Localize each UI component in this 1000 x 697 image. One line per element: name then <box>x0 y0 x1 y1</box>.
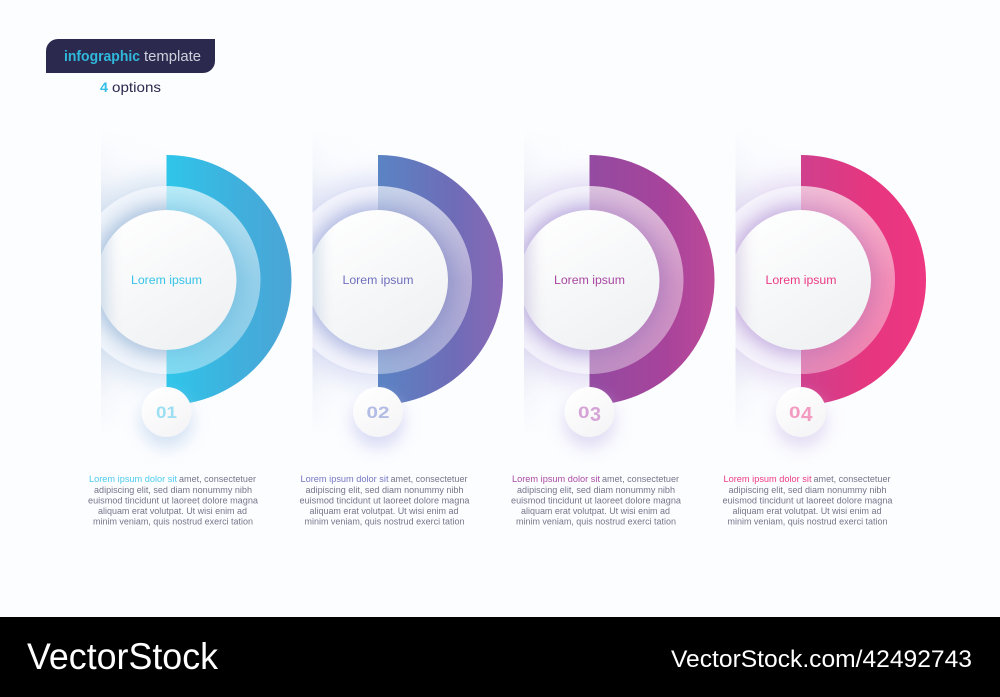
outer half ring <box>590 155 714 405</box>
text block: option 03: aliquam erat volutpat. Ut wisi enim ad <box>521 506 670 516</box>
panel: option 03 <box>524 155 714 452</box>
middle translucent half ring <box>378 186 472 374</box>
text block: option 03: Lorem ipsum dolor sit <box>512 474 601 484</box>
text block: option 04: minim veniam, quis nostrud exerci tation <box>728 516 888 526</box>
text block: option 02: Lorem ipsum dolor sit <box>300 474 389 484</box>
text block: option 03: adipiscing elit, sed diam nonummy nibh <box>517 485 675 495</box>
text block: option 03: minim veniam, quis nostrud exerci tation <box>516 516 676 526</box>
outer half ring <box>801 155 926 405</box>
middle translucent half ring <box>590 186 684 374</box>
number badge 03: 3 <box>590 404 601 426</box>
text block: option 01: minim veniam, quis nostrud exerci tation <box>93 516 253 526</box>
text block: option 04: euismod tincidunt ut laoreet dolore magna <box>722 496 893 506</box>
subtitle: 4 options: options <box>112 79 161 95</box>
outer half ring <box>166 155 292 405</box>
left fade band <box>312 168 324 398</box>
left fade band <box>101 168 112 398</box>
header tag: infographic template: infographic <box>64 49 140 65</box>
text block: option 03: amet, consectetuer <box>602 474 679 484</box>
left halo and translucent ring <box>101 168 166 390</box>
text block: option 01 <box>88 474 258 526</box>
number badge 04 <box>775 387 827 448</box>
outer half ring <box>378 155 503 405</box>
number badge 04: 0 <box>789 403 800 422</box>
label: Lorem ipsum: Lorem ipsum <box>554 275 625 287</box>
left halo and translucent ring <box>524 169 590 390</box>
left halo and translucent ring <box>312 170 378 390</box>
header tag: infographic template: template <box>144 49 201 65</box>
text block: option 02: aliquam erat volutpat. Ut wisi enim ad <box>310 506 459 516</box>
left halo and translucent ring <box>736 170 801 390</box>
text block: option 01: Lorem ipsum dolor sit <box>89 474 178 484</box>
number badge 03 <box>564 387 616 448</box>
number badge 02: 02 <box>366 403 390 422</box>
text block: option 02: minim veniam, quis nostrud exerci tation <box>304 516 465 526</box>
number badge 02 <box>352 387 404 448</box>
inner circle <box>524 210 660 350</box>
text block: option 02 <box>300 474 470 526</box>
panel: option 02 <box>312 155 503 452</box>
inner circle <box>736 210 871 350</box>
text block: option 01: adipiscing elit, sed diam nonummy nibh <box>94 485 252 495</box>
panel: option 01 <box>101 155 292 454</box>
text block: option 01: aliquam erat volutpat. Ut wisi enim ad <box>98 506 247 516</box>
text block: option 04: aliquam erat volutpat. Ut wisi enim ad <box>732 506 882 516</box>
text block: option 01: euismod tincidunt ut laoreet dolore magna <box>88 496 258 506</box>
text block: option 03 <box>511 474 681 526</box>
footer bar: VectorStock <box>0 617 1000 697</box>
label: Lorem ipsum: Lorem ipsum <box>342 275 414 287</box>
number badge 03: 0 <box>578 403 590 422</box>
number badge 04: 4 <box>801 404 813 426</box>
inner circle <box>101 210 236 350</box>
text block: option 01: amet, consectetuer <box>179 474 256 484</box>
inner circle <box>312 210 448 350</box>
header tag: infographic template <box>46 39 215 73</box>
number badge 01: 01 <box>156 403 177 422</box>
label: Lorem ipsum: Lorem ipsum <box>131 275 202 287</box>
footer bar: VectorStock: VectorStock <box>27 636 218 677</box>
text block: option 02: euismod tincidunt ut laoreet dolore magna <box>300 496 470 506</box>
text block: option 04 <box>722 474 893 526</box>
left fade band <box>524 168 533 398</box>
text block: option 03: euismod tincidunt ut laoreet dolore magna <box>511 496 681 506</box>
panel: option 04 <box>736 155 926 452</box>
text block: option 04: adipiscing elit, sed diam nonummy nibh <box>728 485 887 495</box>
text block: option 04: amet, consectetuer <box>814 474 891 484</box>
middle translucent half ring <box>801 186 895 374</box>
text block: option 02: amet, consectetuer <box>390 474 468 484</box>
number badge 01 <box>140 387 192 448</box>
subtitle: 4 options: 4 <box>100 79 108 95</box>
text block: option 02: adipiscing elit, sed diam nonummy nibh <box>306 485 464 495</box>
footer bar: VectorStock: VectorStock.com/42492743 <box>671 646 972 673</box>
text block: option 04: Lorem ipsum dolor sit <box>724 474 812 484</box>
left fade band <box>736 168 744 398</box>
middle translucent half ring <box>166 186 260 374</box>
label: Lorem ipsum: Lorem ipsum <box>766 275 836 287</box>
